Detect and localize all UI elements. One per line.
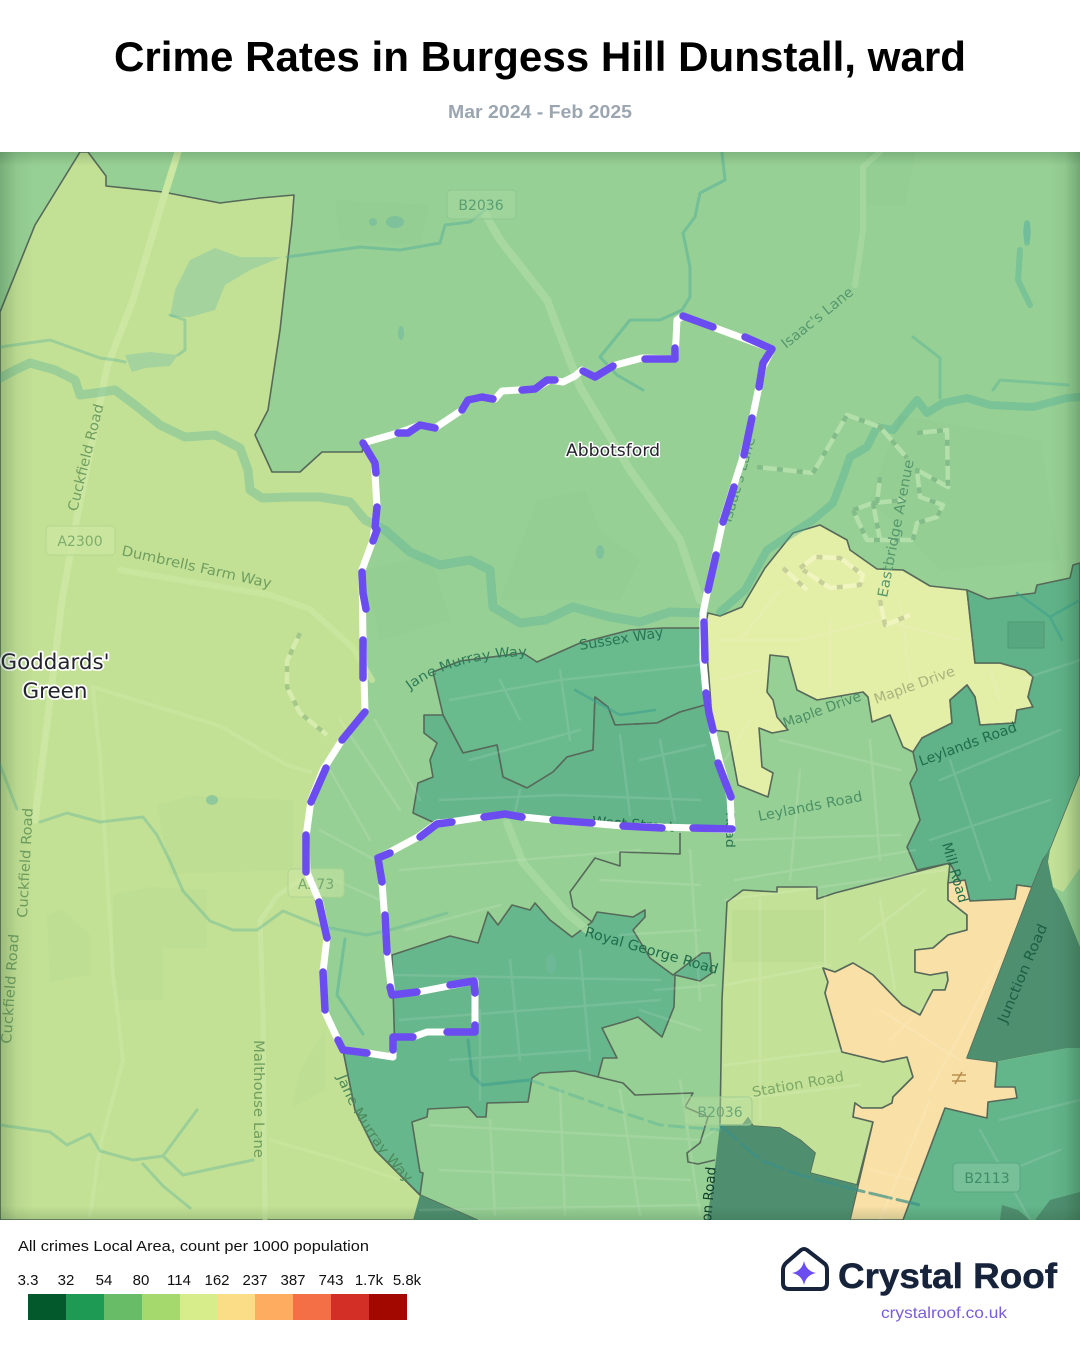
building block east — [1008, 622, 1044, 648]
area: east yellow-green sliver — [1048, 775, 1080, 892]
small water patches — [206, 216, 1031, 974]
choropleth map — [0, 152, 1080, 1220]
icon: railway station — [952, 1072, 966, 1084]
shield: B2036 north — [447, 190, 516, 219]
shield: A2300: A2300 — [57, 534, 103, 550]
shield: B2113: B2113 — [964, 1171, 1010, 1187]
legend values: 80 — [133, 1272, 149, 1289]
divider lines south — [570, 833, 730, 1164]
shield: B2036 north: B2036 — [458, 198, 504, 214]
logo wordmark: Crystal Roof — [838, 1257, 1057, 1296]
area: north ward medium green — [433, 628, 705, 788]
legend values: 3.3 — [18, 1272, 38, 1289]
label: Junction Road: Junction Road — [995, 922, 1051, 1027]
legend colour scale — [28, 1294, 407, 1320]
shield: B2036 south: B2036 — [697, 1105, 743, 1121]
label: Eastbridge Avenue: Eastbridge Avenue — [875, 458, 918, 599]
shield: B2036 south — [685, 1097, 752, 1125]
area: south-east medium green — [903, 1048, 1080, 1220]
footpaths with dashes — [287, 415, 948, 735]
label: Jane Murray Way north: Jane Murray Way — [405, 646, 526, 692]
label: Cuckfield Road north: Cuckfield Road — [65, 402, 107, 513]
place labels — [0, 441, 660, 703]
area: south ward medium green — [343, 903, 712, 1195]
legend values: 32 — [58, 1272, 74, 1289]
rivers — [0, 153, 1080, 1208]
label: Station Road: Station Road — [751, 1069, 845, 1101]
label: Leylands Road west: Leylands Road — [757, 789, 864, 825]
area: central ward medium green — [413, 697, 732, 830]
logo — [783, 1249, 1057, 1322]
legend — [18, 1238, 422, 1320]
roads — [35, 152, 880, 1220]
boundary: white line — [306, 316, 772, 1057]
legend values: 387 — [280, 1272, 306, 1289]
label: Malthouse Lane: Malthouse Lane — [250, 1040, 266, 1158]
label: Royal George Road: Royal George Road — [583, 924, 720, 978]
label: Jane Murray Way south: Jane Murray Way — [334, 1074, 412, 1181]
label: Leylands Road east: Leylands Road — [917, 719, 1019, 770]
ward boundary — [306, 316, 772, 1057]
label: Mill Road: Mill Road — [938, 841, 971, 905]
label: Dumbrells Farm Way: Dumbrells Farm Way — [120, 543, 273, 592]
map background: low crime green — [0, 152, 1080, 1220]
area: dark green Junction Road — [967, 847, 1080, 1062]
label: road fragment south: on Road — [699, 1166, 720, 1222]
shield: A273: A273 — [298, 877, 334, 893]
area: dark green south-centre — [707, 1118, 857, 1220]
legend values: 114 — [167, 1272, 191, 1289]
label: Abbotsford: Abbotsford — [566, 441, 660, 461]
legend values: 1.7k — [355, 1272, 384, 1289]
shield: A2300 — [46, 526, 115, 555]
label: Isaac's Lane along boundary: Isaac's Lane — [719, 435, 759, 524]
legend title: All crimes Local Area, count per 1000 population — [18, 1238, 369, 1255]
area: town centre orange — [823, 880, 1032, 1220]
legend values: 237 — [242, 1272, 268, 1289]
label: Maple Drive west: Maple Drive — [781, 689, 863, 732]
label: Goddards' Green: Goddards' — [0, 650, 110, 674]
residential street pattern — [320, 590, 1080, 1220]
legend values: 162 — [204, 1272, 230, 1289]
label: Cuckfield Road south: Cuckfield Road — [15, 808, 37, 918]
area: western yellow-green zone — [0, 152, 477, 1220]
road shields — [46, 190, 1020, 1192]
map edge vignette — [0, 152, 1080, 1220]
icon: house with crystal — [783, 1249, 827, 1289]
subtitle: date range: Mar 2024 - Feb 2025 — [448, 101, 632, 122]
speckled field — [732, 910, 824, 962]
area: dark band south-west — [413, 1195, 477, 1220]
legend values: 743 — [318, 1272, 344, 1289]
field patches west — [47, 796, 325, 1108]
label: West Street: West Street — [592, 814, 675, 836]
boundary: purple dashes — [306, 316, 772, 1053]
logo url: crystalroof.co.uk — [881, 1305, 1008, 1322]
shield: A273 — [288, 869, 344, 897]
shield: B2113 — [953, 1163, 1020, 1192]
label: Goddards' Green: Green — [22, 679, 88, 703]
label: Goddards' Green — [0, 650, 110, 703]
ponds — [125, 248, 282, 372]
field patches — [335, 152, 1060, 640]
label: road fragment by junction: Road — [723, 812, 737, 848]
label: Maple Drive east: Maple Drive — [872, 664, 957, 708]
area: east medium green — [907, 563, 1080, 901]
title: Crime Rates in Burgess Hill Dunstall, ward — [114, 33, 966, 80]
label: Sussex Way: Sussex Way — [578, 625, 665, 654]
road labels — [1, 289, 1047, 1262]
legend values: 5.8k — [393, 1272, 422, 1289]
label: Isaac's Lane north: Isaac's Lane — [778, 284, 857, 352]
legend values: 54 — [96, 1272, 112, 1289]
legend values — [18, 1272, 422, 1289]
area: central-east yellow-green zone — [720, 863, 967, 1185]
area: pale yellow zone — [705, 525, 1033, 797]
